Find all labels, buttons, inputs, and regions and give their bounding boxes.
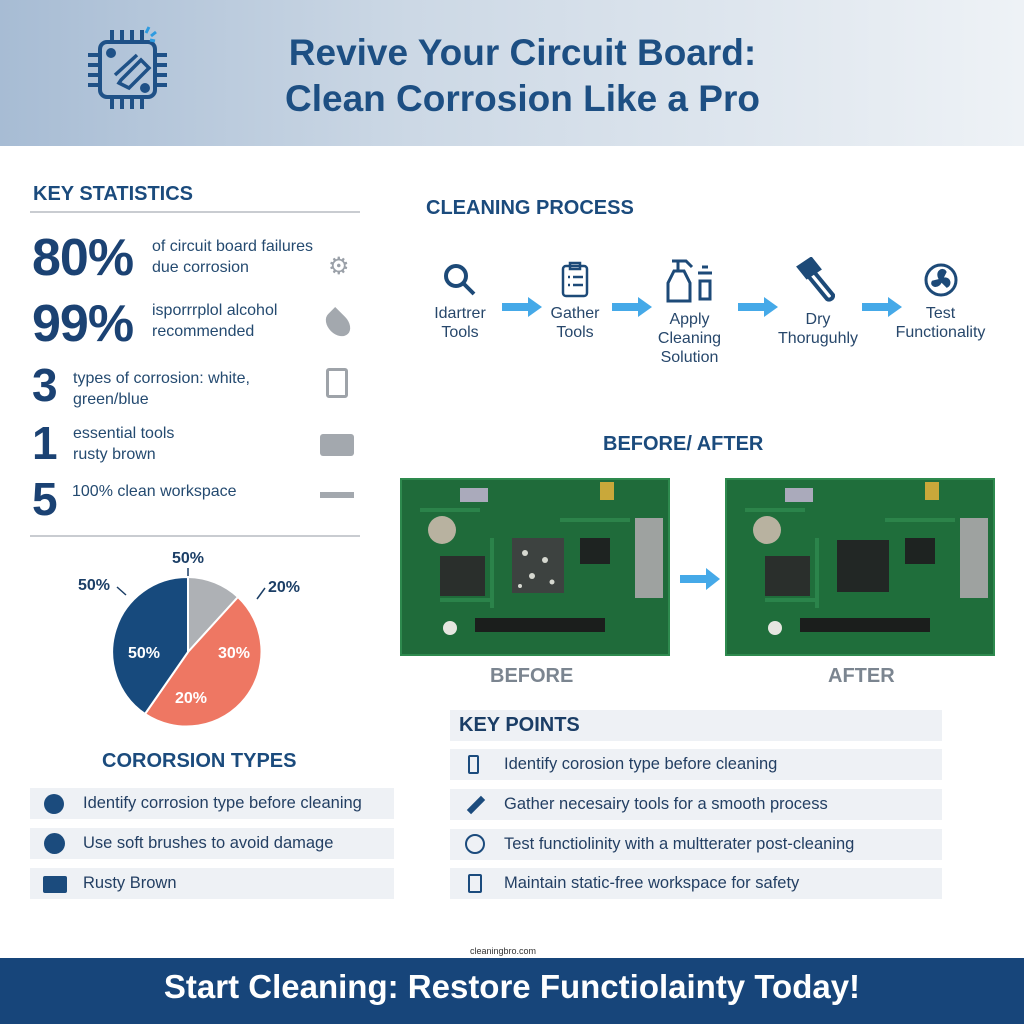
- row 3: Rusty Brown: [83, 874, 177, 892]
- step 3: Solution: [661, 349, 718, 366]
- stat 99%: [32, 295, 350, 353]
- icon: chip with cleaning tool: [88, 26, 167, 109]
- stat 3: [32, 359, 348, 411]
- stat 5: 5: [32, 473, 57, 525]
- stat 99%: 99%: [32, 295, 133, 353]
- point 4: Maintain static-free workspace for safety: [504, 874, 799, 892]
- stat 99%: isporrrplol alcohol: [152, 302, 277, 319]
- heading: KEY STATISTICS: [33, 183, 193, 205]
- stat 80%: 80%: [32, 229, 133, 287]
- point 2: [450, 789, 942, 820]
- step 3: Cleaning: [658, 330, 721, 347]
- pie chart: corrosion types: [78, 550, 300, 726]
- point 3: [450, 829, 942, 860]
- label: before: BEFORE: [490, 665, 573, 687]
- step 1: Tools: [441, 324, 479, 341]
- image: board before: [400, 478, 670, 656]
- row 3: [30, 868, 394, 899]
- stat 3: types of corrosion: white,: [73, 370, 250, 387]
- footer banner: [0, 958, 1024, 1024]
- row 1: Identify corrosion type before cleaning: [83, 794, 362, 812]
- arrow: [502, 297, 542, 317]
- stat 80%: due corrosion: [152, 259, 249, 276]
- stat 3: green/blue: [73, 391, 149, 408]
- panel: cleaning process: [426, 197, 986, 366]
- panel: key statistics: [30, 183, 360, 537]
- step 4: [778, 257, 858, 347]
- image: board after: [725, 478, 995, 656]
- step 2: [551, 262, 600, 341]
- heading: CORORSION TYPES: [102, 750, 296, 772]
- step 3: [658, 260, 721, 366]
- point 3: Test functiolinity with a multterater post-cleaning: [504, 835, 854, 853]
- stat 1: [32, 417, 354, 469]
- pie chart: corrosion types: 50%: [78, 577, 110, 594]
- panel: corrosion types: [30, 750, 394, 899]
- title: [285, 32, 760, 119]
- row 2: Use soft brushes to avoid damage: [83, 834, 333, 852]
- point 1: [450, 749, 942, 780]
- step 5: Test: [926, 305, 955, 322]
- arrow: [738, 297, 778, 317]
- stat 1: rusty brown: [73, 446, 156, 463]
- stat 80%: [32, 229, 350, 287]
- pie chart: corrosion types: 50%: [128, 645, 160, 662]
- panel: key points: [450, 710, 942, 899]
- stat 80%: ⚙: [328, 253, 350, 280]
- row 2: [30, 828, 394, 859]
- stat 5: 100% clean workspace: [72, 483, 237, 500]
- heading: KEY POINTS: [459, 714, 580, 736]
- step 2: Tools: [556, 324, 594, 341]
- heading: before/after: BEFORE/ AFTER: [603, 433, 763, 455]
- pie chart: corrosion types: 50%: [172, 550, 204, 567]
- point 2: Gather necesairy tools for a smooth process: [504, 795, 828, 813]
- heading: [450, 710, 942, 741]
- step 5: Functionality: [896, 324, 985, 341]
- source text: cleaningbro.com: [470, 946, 536, 956]
- pie chart: corrosion types: 20%: [175, 690, 207, 707]
- arrow: [612, 297, 652, 317]
- label: after: AFTER: [828, 665, 895, 687]
- step 3: Apply: [669, 311, 710, 328]
- point 1: Identify corosion type before cleaning: [504, 755, 777, 773]
- step 4: Thoruguhly: [778, 330, 858, 347]
- pie chart: corrosion types: 20%: [268, 579, 300, 596]
- stat 80%: of circuit board failures: [152, 238, 313, 255]
- arrow: before to after: [680, 568, 720, 590]
- title: Clean Corrosion Like a Pro: [285, 78, 760, 119]
- footer banner: Start Cleaning: Restore Functiolainty Today!: [164, 968, 860, 1005]
- step 5: [896, 264, 986, 341]
- heading: CLEANING PROCESS: [426, 197, 634, 219]
- arrow: [862, 297, 902, 317]
- step 4: Dry: [806, 311, 830, 328]
- stat 1: essential tools: [73, 425, 174, 442]
- title: Revive Your Circuit Board:: [289, 32, 756, 73]
- stat 99%: recommended: [152, 323, 254, 340]
- step 1: Idartrer: [434, 305, 486, 322]
- stat 5: [32, 473, 354, 525]
- stat 3: 3: [32, 359, 57, 411]
- header banner: [0, 0, 1024, 146]
- step 1: [434, 264, 486, 341]
- step 2: Gather: [551, 305, 599, 322]
- row 1: [30, 788, 394, 819]
- stat 1: 1: [32, 417, 57, 469]
- pie chart: corrosion types: 30%: [218, 645, 250, 662]
- point 4: [450, 868, 942, 899]
